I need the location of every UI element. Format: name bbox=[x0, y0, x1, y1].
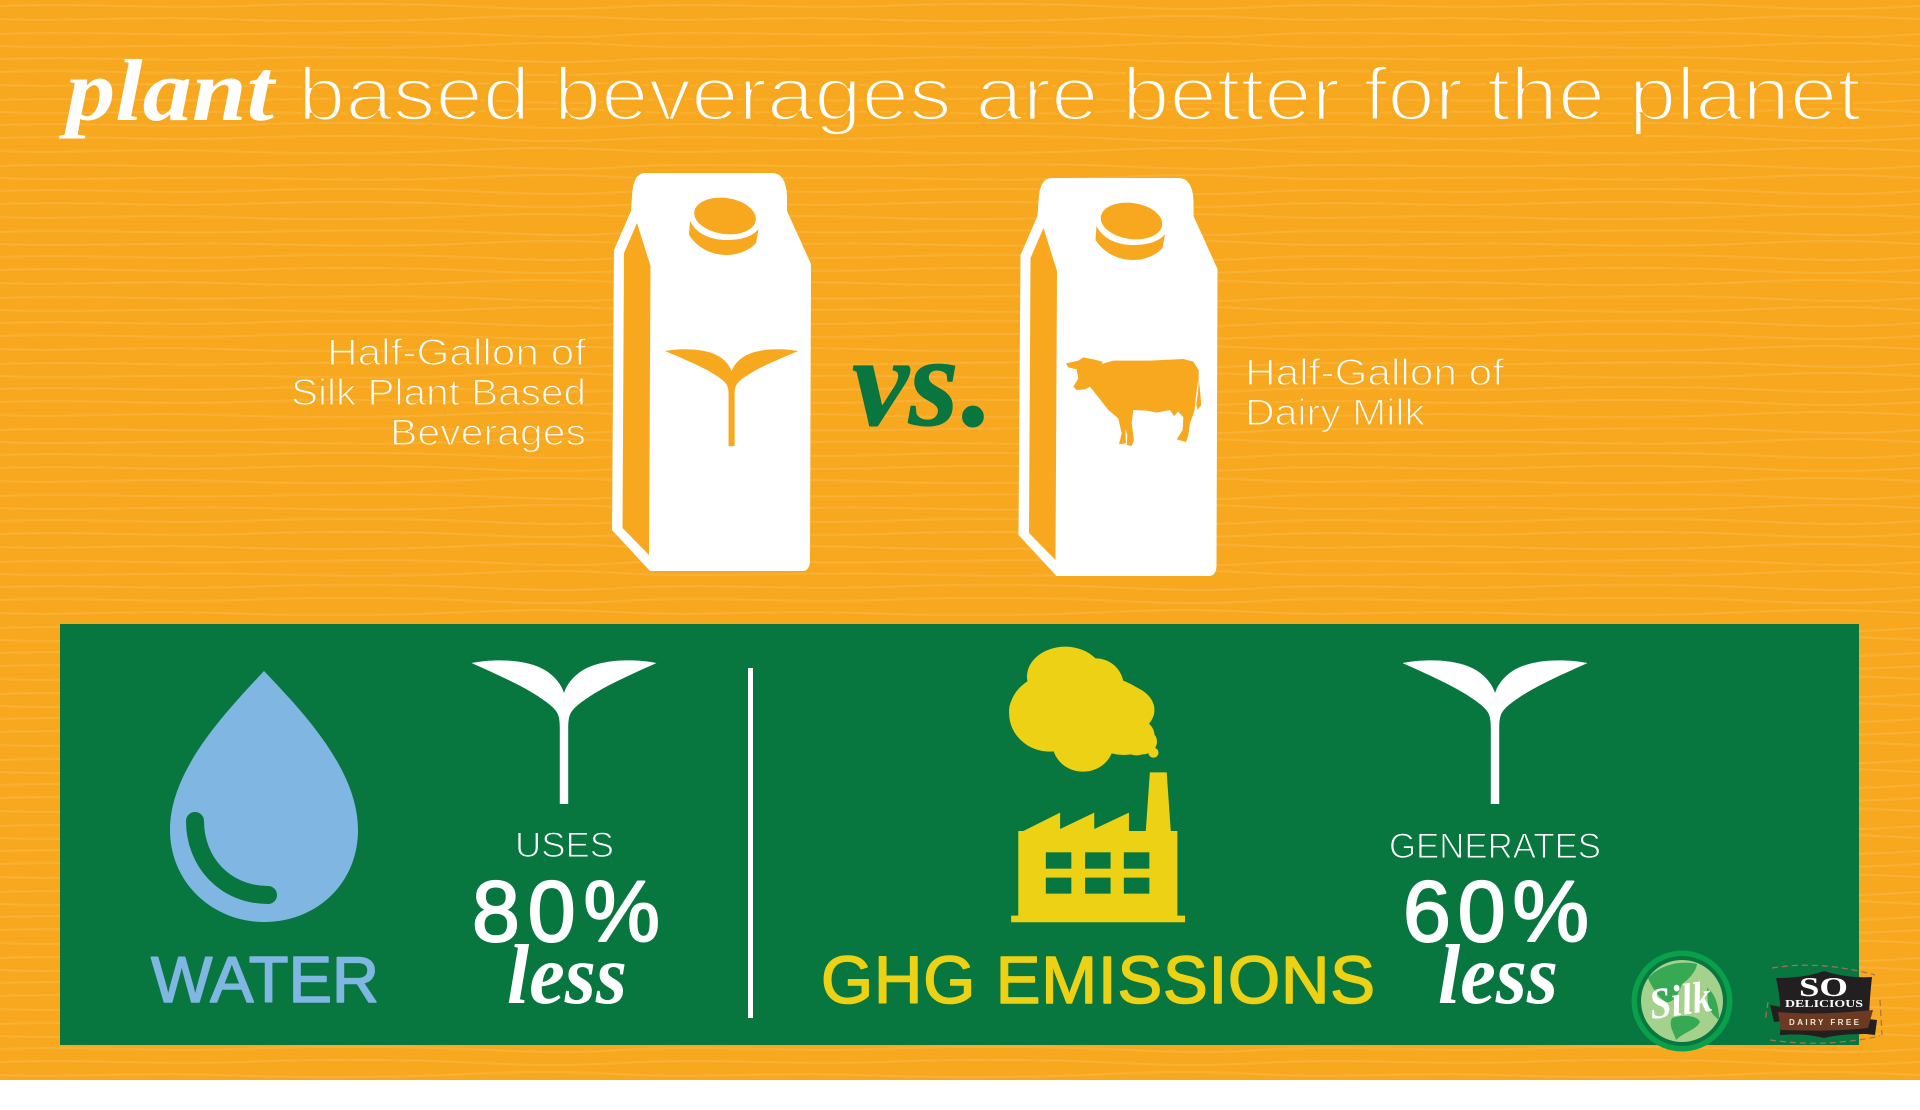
logo: Silk bbox=[1632, 950, 1732, 1052]
icon: leaf water bbox=[472, 660, 656, 804]
label: dairy half-gallon: Half-Gallon of bbox=[1245, 352, 1505, 393]
icon: leaf emissions bbox=[1402, 660, 1588, 804]
stat: emissions 60 percent less: GENERATES bbox=[1389, 827, 1601, 866]
icon: dairy carton bbox=[1018, 178, 1218, 576]
label: dairy half-gallon bbox=[1245, 352, 1505, 433]
stat: water 80 percent less bbox=[472, 826, 660, 1022]
label: dairy half-gallon: Dairy Milk bbox=[1245, 392, 1426, 433]
vs. label: vs. bbox=[852, 311, 994, 453]
label: silk half-gallon: Beverages bbox=[390, 412, 586, 453]
logo: Silk: Silk bbox=[1646, 972, 1714, 1029]
icon: plant-based carton bbox=[612, 173, 811, 571]
stat: emissions 60 percent less bbox=[1389, 827, 1601, 1022]
icon: water drop bbox=[170, 671, 358, 922]
title remainder: based beverages are better for the planet bbox=[298, 52, 1861, 136]
logo: So Delicious: SO bbox=[1799, 972, 1848, 1002]
icon: emissions cloud bbox=[1009, 647, 1159, 772]
title word: plant: plant bbox=[58, 43, 277, 140]
label: water: WATER bbox=[151, 943, 379, 1016]
logo: So Delicious: DAIRY FREE bbox=[1789, 1018, 1860, 1027]
title bbox=[58, 43, 1861, 140]
stat: water 80 percent less: 80% bbox=[472, 864, 660, 960]
stat: emissions 60 percent less: less bbox=[1438, 928, 1558, 1022]
icon: factory bbox=[1011, 772, 1185, 922]
logo: So Delicious bbox=[1765, 965, 1882, 1043]
stat: water 80 percent less: less bbox=[507, 928, 627, 1022]
logo: So Delicious: DELICIOUS bbox=[1785, 999, 1863, 1010]
label: silk half-gallon: Silk Plant Based bbox=[291, 372, 586, 413]
label: ghg emissions: GHG EMISSIONS bbox=[821, 943, 1375, 1018]
stat: water 80 percent less: USES bbox=[515, 826, 614, 865]
stat: emissions 60 percent less: 60% bbox=[1403, 864, 1589, 960]
label: silk half-gallon: Half-Gallon of bbox=[327, 332, 587, 373]
panel: green comparison band bbox=[60, 624, 1859, 1045]
icon: cow bbox=[1066, 357, 1201, 446]
label: silk half-gallon bbox=[291, 332, 587, 453]
